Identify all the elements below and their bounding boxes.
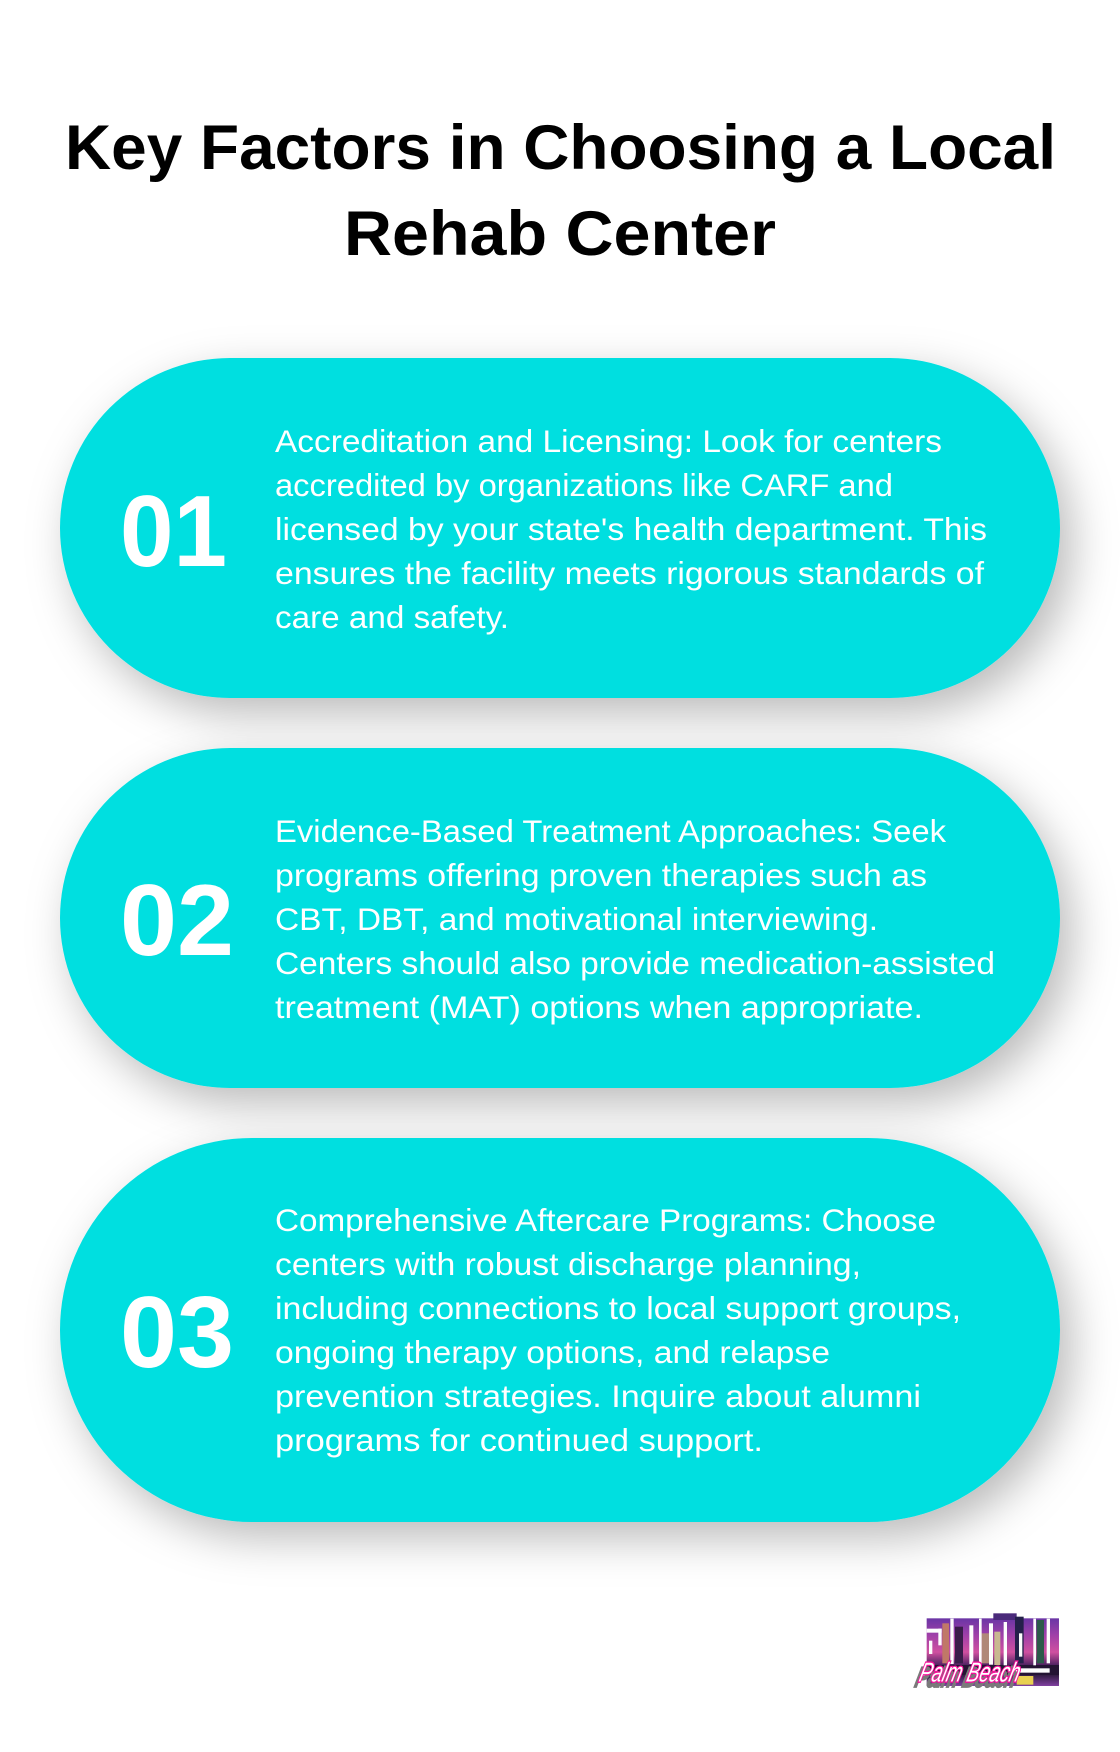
title xyxy=(65,113,1056,269)
text block 03: ongoing therapy options, and relapse xyxy=(275,1334,830,1370)
panel: step 03 comprehensive aftercare xyxy=(60,1138,1060,1522)
pill background 02 xyxy=(60,748,1060,1088)
text block 03: including connections to local support groups, xyxy=(275,1290,961,1326)
text block 03: prevention strategies. Inquire about alumni xyxy=(275,1378,921,1414)
title: Rehab Center xyxy=(344,199,776,269)
text block 02 xyxy=(275,813,995,1025)
text block 01: licensed by your state's health department. This xyxy=(275,511,987,547)
icon: amity palm beach logo xyxy=(913,1613,1059,1693)
number 01: 01 xyxy=(120,476,227,588)
text block 02: treatment (MAT) options when appropriate. xyxy=(275,989,923,1025)
logo city block xyxy=(927,1618,1059,1686)
text block 02: CBT, DBT, and motivational interviewing. xyxy=(275,901,878,937)
pill background 01 xyxy=(60,358,1060,698)
text block 01 xyxy=(275,423,987,635)
logo script text: Palm Beach xyxy=(917,1657,1024,1687)
text block 01: accredited by organizations like CARF and xyxy=(275,467,893,503)
text block 03: programs for continued support. xyxy=(275,1422,763,1458)
text block 01: Accreditation and Licensing: Look for centers xyxy=(275,423,942,459)
text block 02: Centers should also provide medication-assisted xyxy=(275,945,995,981)
panel: step 02 evidence-based treatment xyxy=(60,748,1060,1088)
logo script text xyxy=(913,1657,1024,1693)
text block 03: Comprehensive Aftercare Programs: Choose xyxy=(275,1202,936,1238)
white letter cuts xyxy=(927,1619,1050,1673)
panel: step 01 accreditation and licensing xyxy=(60,358,1060,698)
pill background 03 xyxy=(60,1138,1060,1522)
text block 02: Evidence-Based Treatment Approaches: Seek xyxy=(275,813,946,849)
text block 01: ensures the facility meets rigorous standards of xyxy=(275,555,984,591)
title: Key Factors in Choosing a Local xyxy=(65,113,1056,183)
text block 03: centers with robust discharge planning, xyxy=(275,1246,861,1282)
text block 03 xyxy=(275,1202,961,1458)
text block 01: care and safety. xyxy=(275,599,509,635)
text block 02: programs offering proven therapies such as xyxy=(275,857,927,893)
number 02: 02 xyxy=(120,865,234,977)
logo script text: Palm Beach xyxy=(913,1662,1020,1693)
number 03: 03 xyxy=(120,1277,234,1389)
